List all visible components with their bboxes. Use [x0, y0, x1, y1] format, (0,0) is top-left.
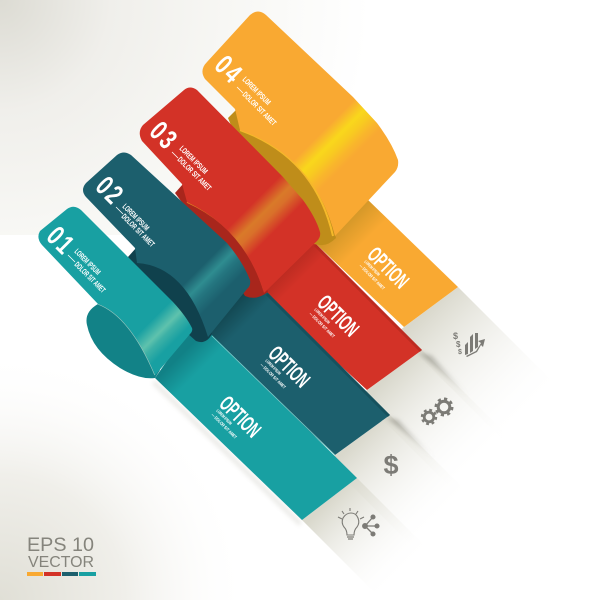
option 01: — DOLOR SIT AMET: [210, 412, 238, 440]
eps title: EPS 10: [27, 535, 94, 556]
band 01 surface: [155, 328, 357, 520]
band 04: [315, 197, 458, 327]
band 03 surface: [258, 236, 422, 390]
cylinder 02 front: [83, 152, 250, 337]
caption 01: DOLOR SIT AMET: [73, 260, 107, 295]
icon: stock chart: $: [456, 340, 461, 349]
cylinder 01 end disc: [86, 304, 160, 378]
caption 04: LOREM IPSUM: [241, 75, 273, 107]
band 01: [155, 328, 357, 520]
band 02 surface: [203, 285, 390, 455]
icon: stock chart: $: [453, 331, 458, 341]
option 03: OPTION: [312, 290, 364, 341]
caption 02: [116, 202, 156, 249]
cylinder 04 rim: [240, 130, 333, 236]
option 04: [358, 242, 414, 293]
option 04: LOREM IPSUM: [363, 259, 381, 277]
eps badge: [27, 535, 96, 576]
cylinder 04 inner shade: [228, 110, 336, 245]
option 02: [259, 341, 315, 392]
cylinder 03 rim: [187, 202, 264, 290]
caption 02: LOREM IPSUM: [121, 202, 151, 233]
band 03 top shade: [315, 245, 421, 351]
cylinder 01 rim: [98, 304, 155, 375]
vector title: VECTOR: [28, 554, 94, 571]
caption 01: [68, 247, 107, 295]
panel: chart icon strip: [396, 287, 580, 455]
cylinder 01: [38, 207, 192, 378]
shadow under teal band: [152, 380, 302, 526]
option 01: [210, 391, 266, 442]
panel: dollar icon strip: [327, 415, 493, 564]
option 02: LOREM IPSUM: [264, 358, 282, 376]
band 02 top shade: [267, 294, 389, 416]
band 03: [258, 236, 422, 390]
label 01: 01: [40, 221, 81, 262]
option 01: LOREM IPSUM: [215, 408, 233, 426]
option 01: OPTION: [214, 391, 266, 442]
cylinder 04 front: [202, 12, 398, 236]
caption 03: DOLOR SIT AMET: [176, 155, 213, 193]
band 02: [203, 285, 390, 455]
option 04: OPTION: [362, 242, 414, 293]
caption 03: [172, 144, 213, 193]
band 04 surface: [315, 197, 458, 327]
cylinder 03: [140, 88, 320, 298]
option 02: OPTION: [263, 341, 315, 392]
cylinder 01 front: [38, 207, 192, 375]
icon: light bulb and share: [338, 508, 379, 539]
icon: stock chart: [453, 331, 485, 357]
icon: stock chart: $: [458, 349, 462, 356]
cylinder 02: [83, 152, 250, 342]
panel: gears icon strip: [359, 350, 540, 514]
label 02: 02: [89, 171, 130, 212]
icon: dollar: $: [383, 450, 399, 480]
colour strips: [27, 572, 96, 576]
option 03: LOREM IPSUM: [313, 307, 331, 325]
caption 04: [237, 75, 278, 128]
label 04: 04: [208, 50, 249, 91]
icon: gears: [422, 399, 452, 424]
option 02: — DOLOR SIT AMET: [259, 362, 287, 390]
option 03: [308, 290, 364, 341]
cylinder 04: [202, 12, 398, 245]
band 01 edge highlight: [212, 336, 335, 455]
caption 03: LOREM IPSUM: [178, 144, 210, 176]
cylinder 02 inner shade: [128, 248, 212, 342]
option 03: — DOLOR SIT AMET: [308, 311, 336, 339]
caption 01: LOREM IPSUM: [73, 247, 102, 277]
panel: idea icon strip: [302, 478, 460, 600]
cylinder 03 inner shade: [175, 184, 268, 298]
option 04: — DOLOR SIT AMET: [358, 263, 386, 291]
caption 04: DOLOR SIT AMET: [241, 90, 278, 128]
caption 02: DOLOR SIT AMET: [120, 212, 156, 249]
cylinder 03 front: [140, 88, 320, 293]
label 03: 03: [143, 116, 184, 157]
strip shadow: gears: [418, 352, 470, 398]
strip shadow: dollar: [386, 417, 436, 460]
